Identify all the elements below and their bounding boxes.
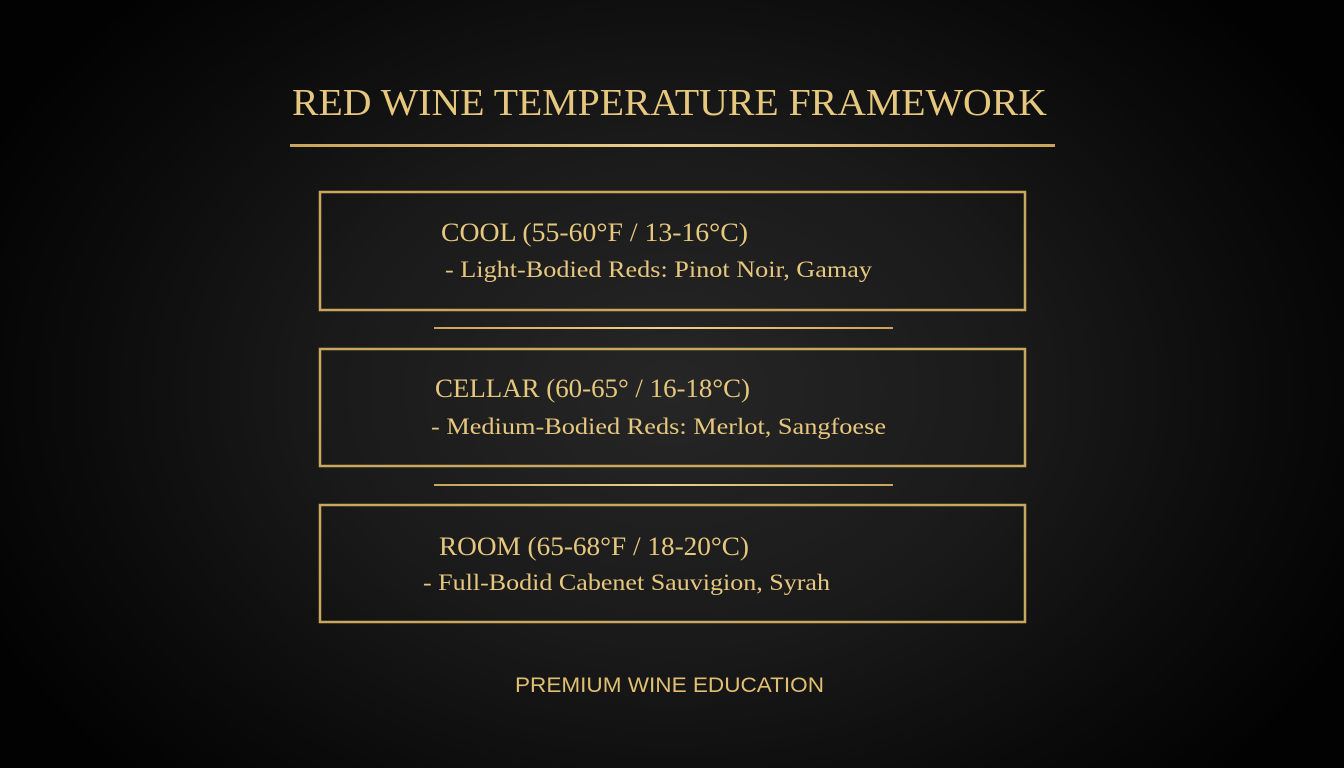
panel: room xyxy=(320,505,1025,622)
heading: room: ROOM (65-68°F / 18-20°C) xyxy=(439,532,749,561)
text: cool wines: - Light-Bodied Reds: Pinot Noir, Gamay xyxy=(445,257,873,282)
heading: cellar: CELLAR (60-65° / 16-18°C) xyxy=(435,374,750,403)
text: room wines: - Full-Bodid Cabenet Sauvigion, Syrah xyxy=(423,570,831,595)
panel: cellar xyxy=(320,349,1025,466)
text: cellar wines: - Medium-Bodied Reds: Merlot, Sangfoese xyxy=(431,414,886,439)
title: RED WINE TEMPERATURE FRAMEWORK xyxy=(292,82,1048,124)
panel: cool xyxy=(320,192,1025,310)
heading: cool: COOL (55-60°F / 13-16°C) xyxy=(441,218,748,247)
footer: PREMIUM WINE EDUCATION xyxy=(515,674,824,697)
